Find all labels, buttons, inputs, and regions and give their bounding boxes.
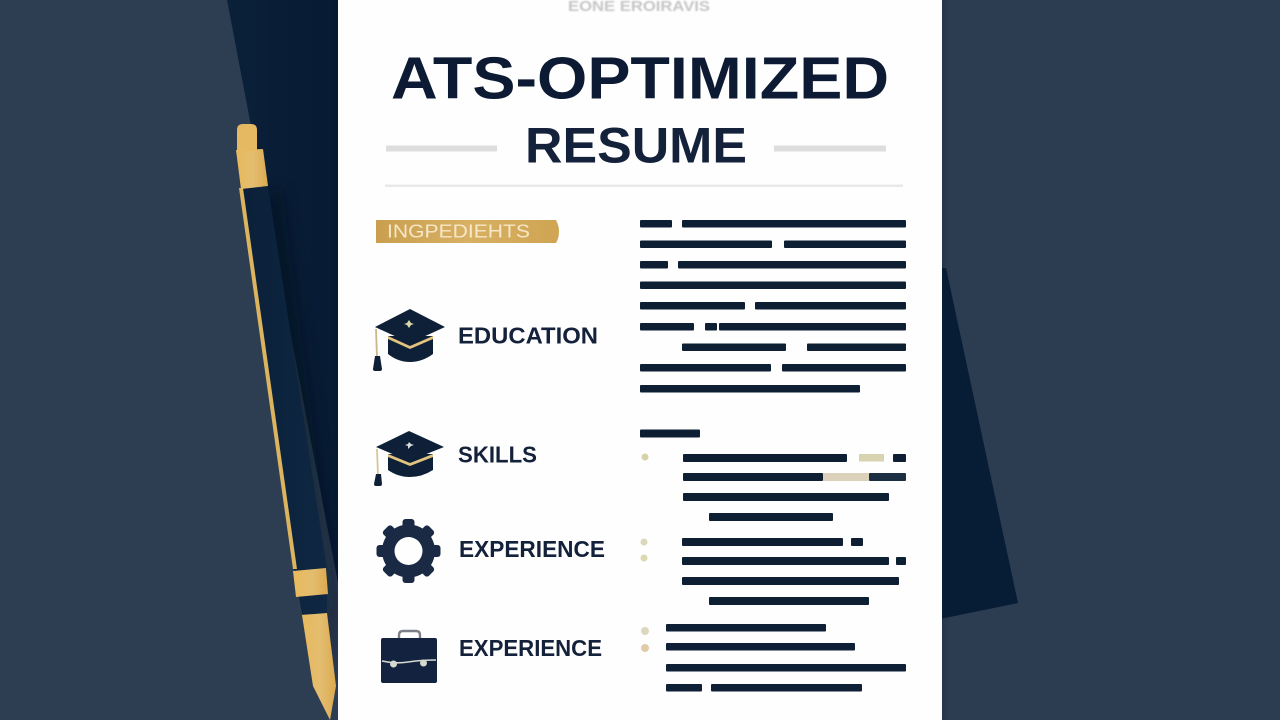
- panel: resume sheet: [338, 0, 942, 720]
- pen band: [293, 568, 328, 597]
- pen cap collar: [236, 149, 268, 189]
- icon: gear: [376, 519, 440, 583]
- pen cap top: [237, 124, 257, 151]
- subtitle: RESUME: [525, 118, 747, 174]
- tag shape: [376, 220, 559, 243]
- text block: summary redacted lines: [640, 220, 906, 392]
- icon: graduation cap: [373, 309, 445, 371]
- label: EXPERIENCE: [459, 635, 602, 661]
- item: experience briefcase: [381, 631, 602, 683]
- label: EDUCATION: [458, 322, 598, 348]
- text block: section heading line: [640, 430, 700, 438]
- pen clip line: [239, 188, 297, 569]
- background: right: [940, 0, 1280, 720]
- tag text: INGPEDIEHTS: [387, 220, 530, 242]
- text block: experience redacted lines: [640, 538, 906, 605]
- icon: graduation cap: [374, 431, 444, 486]
- text block: skills redacted lines: [642, 454, 906, 521]
- subtitle rule right: [774, 146, 886, 152]
- item: experience gear: [376, 519, 605, 583]
- icon: briefcase: [381, 631, 437, 683]
- sheet: [338, 0, 942, 720]
- section tag: [376, 220, 559, 243]
- pen: [236, 124, 336, 720]
- item: skills: [374, 431, 537, 486]
- pen shadow: [262, 190, 336, 690]
- pen barrel: [241, 187, 327, 614]
- pen nib: [302, 613, 336, 720]
- background: left: [0, 0, 340, 720]
- label: EXPERIENCE: [459, 536, 605, 562]
- item: education: [373, 309, 598, 371]
- text block: final experience redacted lines: [641, 624, 906, 692]
- back sheet: left side: [227, 0, 364, 720]
- header divider: [385, 184, 903, 187]
- title: ATS-OPTIMIZED: [391, 46, 889, 112]
- back sheet: right corner: [940, 268, 1018, 619]
- label: SKILLS: [458, 442, 537, 468]
- subtitle rule left: [386, 146, 497, 152]
